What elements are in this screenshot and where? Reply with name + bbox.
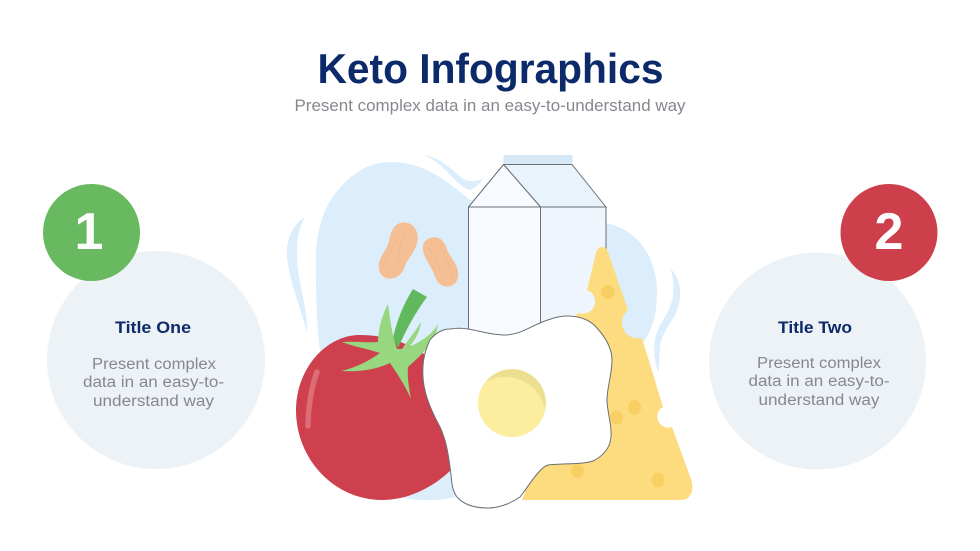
text block left: Present complex <box>92 356 216 373</box>
carton front face <box>468 207 540 345</box>
cheese <box>522 247 692 500</box>
egg white <box>423 316 612 508</box>
tomato highlight <box>308 372 317 426</box>
cheese holes <box>571 285 664 488</box>
carton cap <box>504 155 572 164</box>
subtitle: Present complex data in an easy-to-understand way <box>294 96 686 115</box>
text block right: data in an easy-to- <box>748 373 890 390</box>
illustration: keto foods <box>287 155 692 508</box>
badge: number 2: 2 <box>875 203 903 261</box>
carton roof front <box>468 164 540 207</box>
egg yolk <box>478 369 546 437</box>
panel: left card <box>43 184 265 469</box>
text block left: understand way <box>93 393 214 410</box>
badge: number 1 <box>43 184 140 281</box>
text block left <box>83 356 224 410</box>
carton roof side <box>504 164 606 207</box>
text block right: Present complex <box>757 355 881 372</box>
background blob <box>287 155 680 500</box>
milk carton <box>468 155 606 345</box>
badge: number 1: 1 <box>75 203 103 261</box>
text block right <box>748 355 890 409</box>
tomato leaves <box>341 304 438 399</box>
carton side face <box>540 207 606 345</box>
heading: Title One: Title One <box>115 318 191 337</box>
text block left: data in an easy-to- <box>83 374 224 391</box>
badge: number 2 <box>840 184 938 281</box>
text block right: understand way <box>758 392 880 409</box>
fried egg <box>423 316 612 508</box>
card circle right <box>709 252 926 470</box>
title: Keto Infographics <box>318 45 664 92</box>
card circle left <box>47 251 265 469</box>
peanuts <box>379 222 458 286</box>
heading: Title Two: Title Two <box>778 318 852 337</box>
tomato <box>296 289 455 500</box>
panel: right card <box>709 184 938 470</box>
tomato stem <box>393 289 427 348</box>
